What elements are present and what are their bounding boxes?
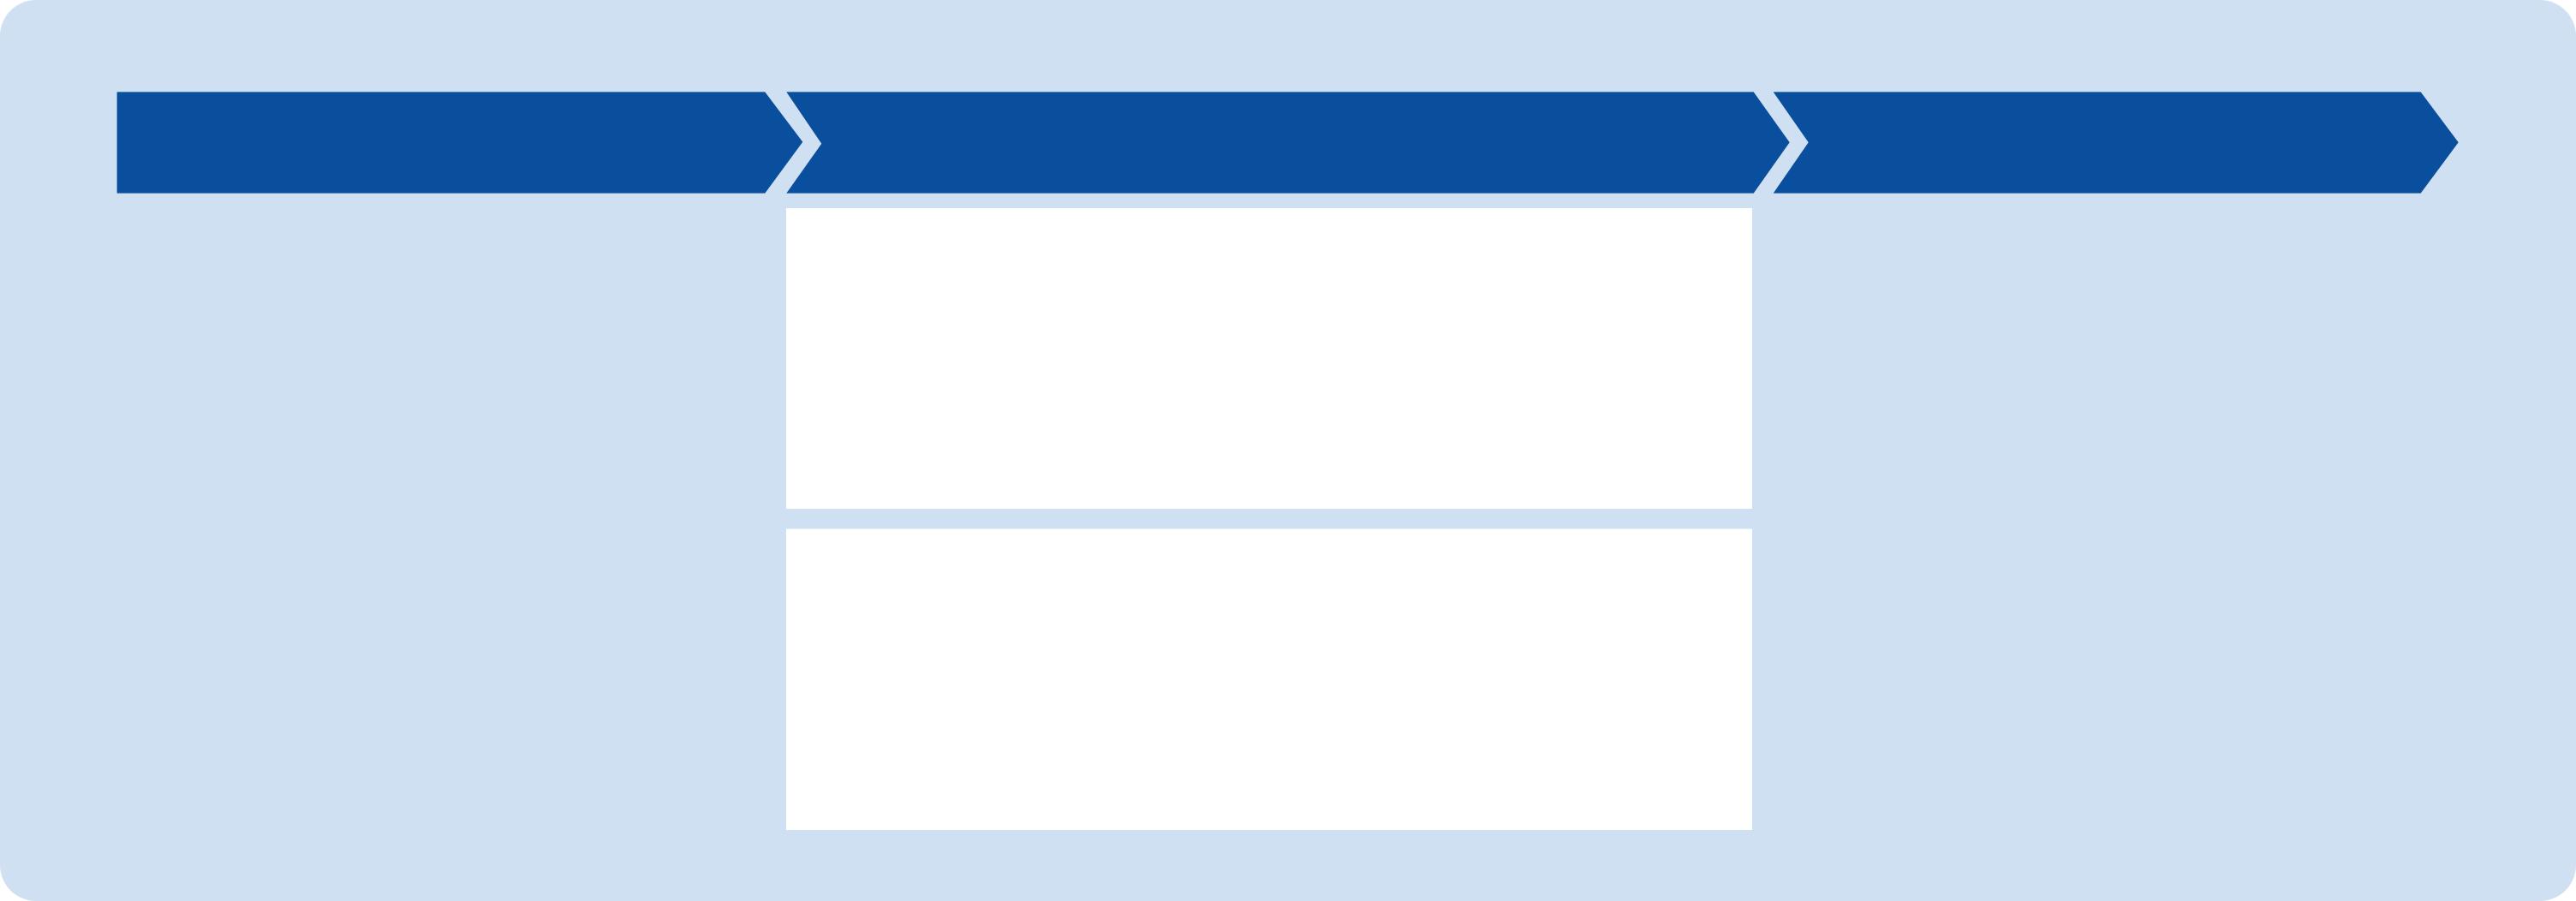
arrow: second chevron header [786, 92, 1790, 194]
panel: lower white box [786, 529, 1752, 830]
panel: upper white box [786, 208, 1752, 509]
arrow: third chevron header [1774, 92, 2459, 194]
arrow: first chevron header [117, 92, 802, 194]
